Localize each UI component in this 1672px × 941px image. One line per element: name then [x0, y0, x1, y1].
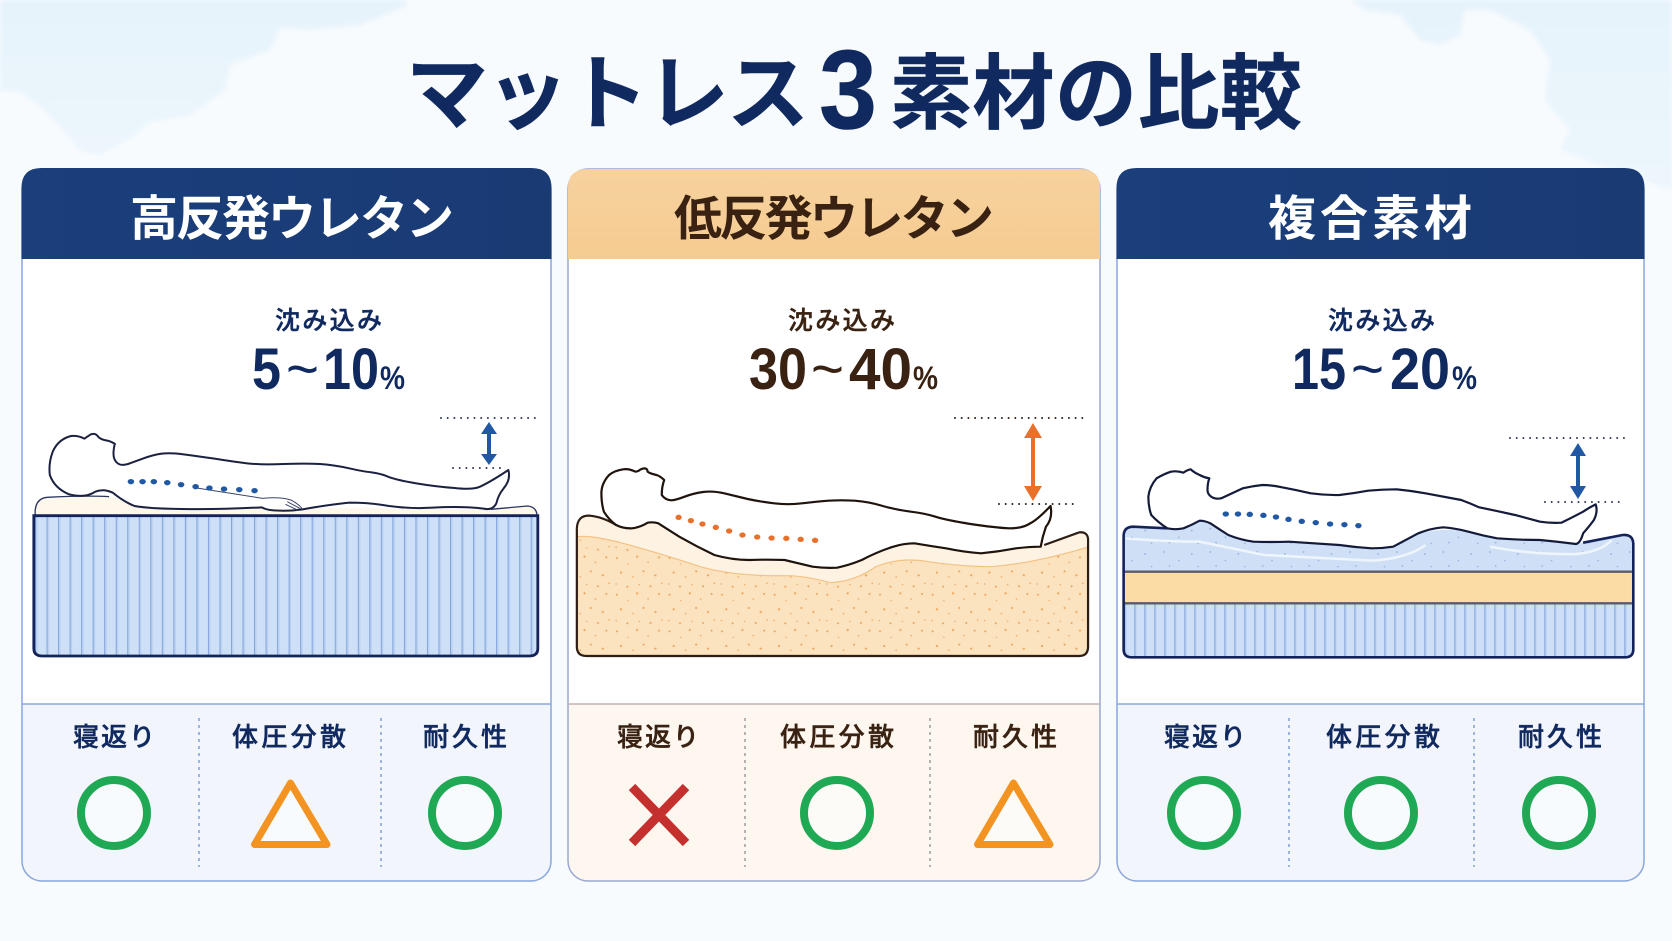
foam outline: [577, 516, 1088, 656]
rating area background: [1117, 704, 1644, 881]
header band: [22, 168, 552, 259]
sink depth guides and arrow: [441, 418, 536, 468]
title: 素材の比較: [890, 49, 1302, 140]
rating: 耐久性 ○: [423, 722, 507, 846]
sink value: ~: [811, 337, 844, 402]
rating: 体圧分散 ○: 体圧分散: [780, 722, 894, 752]
sink value: %: [1452, 360, 1477, 396]
rating: 体圧分散 △: [232, 722, 346, 844]
rating: 体圧分散 ○: [780, 722, 894, 846]
header text: 高反発ウレタン: [130, 193, 454, 246]
spine dots: [128, 479, 258, 493]
sink value: %: [913, 360, 938, 396]
rating: 耐久性 ○: 耐久性: [1518, 722, 1602, 752]
sink value: [252, 337, 405, 402]
layer separators and outline: [1124, 572, 1633, 603]
card body: [1117, 169, 1644, 881]
sink value: 40: [849, 337, 912, 402]
arm and hand: [193, 487, 303, 510]
panel: 複合素材: [1116, 168, 1644, 881]
panel: 高反発ウレタン: [22, 168, 552, 881]
sink label: 沈み込み: [1328, 307, 1435, 335]
rating dividers: [745, 718, 930, 867]
rating: 耐久性 ○: 耐久性: [423, 722, 507, 752]
rating: 耐久性 △: 耐久性: [973, 722, 1057, 752]
rating: 体圧分散 ○: 体圧分散: [1326, 722, 1440, 752]
rating dividers: [1289, 718, 1474, 867]
foam core: [578, 536, 1087, 655]
sink value: ~: [1351, 337, 1384, 402]
person outline: [601, 468, 1051, 568]
rating: 寝返り ○: [73, 722, 155, 846]
rating area background: [22, 704, 551, 881]
mattress block: [34, 516, 538, 656]
sink value: 20: [1390, 337, 1450, 402]
rating: 寝返り ○: 寝返り: [1164, 722, 1246, 752]
rating: 体圧分散 ○: [1326, 722, 1440, 846]
card outline: [1117, 169, 1644, 881]
card body: [568, 169, 1100, 881]
topper outline: [35, 496, 537, 516]
spine dots: [1223, 511, 1362, 528]
rating: 耐久性 △: [973, 722, 1057, 844]
rating: 寝返り ○: 寝返り: [73, 722, 155, 752]
mattress illustration: firm springs with person: [34, 434, 538, 656]
rating: 寝返り ×: [617, 722, 699, 843]
card body: [22, 169, 551, 881]
sink value: [749, 337, 938, 402]
rating area background: [568, 704, 1100, 881]
middle yellow layer: [1124, 572, 1633, 603]
topper: [35, 496, 537, 516]
sink value: ~: [286, 337, 319, 402]
sink value: 30: [749, 337, 807, 402]
bottom spring layer: [1124, 603, 1633, 657]
sink depth guides and arrow: [1510, 438, 1628, 502]
spine dots: [675, 515, 818, 543]
rating: 寝返り ○: [1164, 722, 1246, 846]
comfort layer highlight: [1126, 538, 1612, 561]
foam outer comfort layer: [577, 516, 1088, 656]
sink label: 沈み込み: [275, 307, 382, 335]
rating: 耐久性 ○: [1518, 722, 1602, 846]
mattress illustration: soft foam with person: [577, 468, 1088, 656]
title: 3: [819, 27, 877, 152]
person outline: [49, 434, 509, 511]
mattress illustration: hybrid layers with person: [1124, 469, 1633, 657]
sink value: 5: [252, 337, 281, 402]
sink value: %: [380, 360, 405, 396]
sink value: 15: [1292, 337, 1346, 402]
panel: 低反発ウレタン: [568, 169, 1100, 881]
rating: 体圧分散 △: 体圧分散: [232, 722, 346, 752]
sink value: 10: [323, 337, 379, 402]
header band: [568, 169, 1100, 259]
header text: 低反発ウレタン: [674, 193, 994, 246]
card outline: [22, 169, 551, 881]
sink depth guides and arrow: [955, 418, 1083, 504]
top comfort layer: [1124, 521, 1633, 572]
header text: 複合素材: [1268, 193, 1472, 246]
title: マットレス: [406, 49, 809, 140]
header band: [1116, 168, 1644, 259]
rating: 寝返り ×: 寝返り: [617, 722, 699, 752]
rating dividers: [199, 718, 381, 867]
sink label: 沈み込み: [788, 307, 895, 335]
title: [406, 27, 1302, 152]
sink value: [1292, 337, 1477, 402]
card outline: [568, 169, 1100, 881]
person outline: [1148, 469, 1597, 548]
